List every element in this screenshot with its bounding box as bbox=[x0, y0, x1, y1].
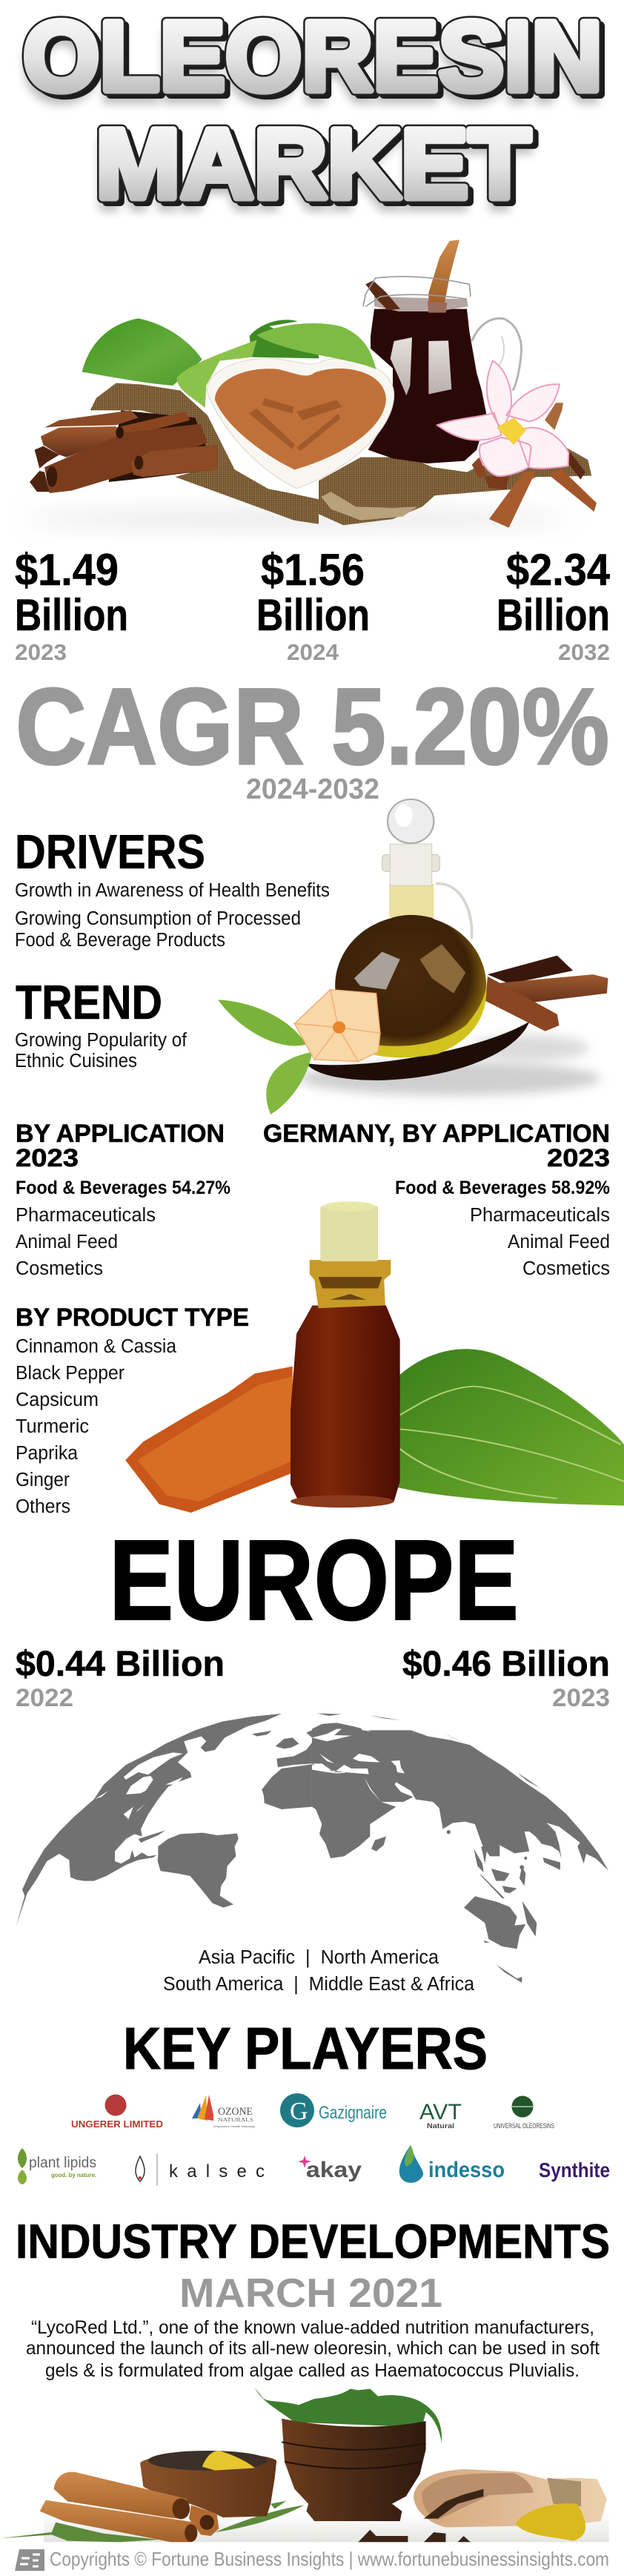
logo: Ozone Naturals: NATURALS bbox=[218, 2117, 253, 2123]
world map globe bbox=[16, 1714, 608, 1983]
development description: “LycoRed Ltd.”, one of the known value-added nutrition manufacturers, bbox=[31, 2317, 594, 2338]
Europe 2022 value: 2022 bbox=[16, 1684, 73, 1712]
stat: 2032 market size: $2.34 bbox=[506, 545, 611, 595]
development description bbox=[26, 2317, 600, 2381]
Europe 2022 value bbox=[16, 1645, 225, 1712]
logo: plant lipids: good. by nature. bbox=[51, 2172, 96, 2179]
by product type panel: Paprika bbox=[16, 1443, 79, 1464]
by product type panel: Turmeric bbox=[16, 1416, 89, 1437]
logo: Gazignaire bbox=[280, 2093, 387, 2127]
date: MARCH 2021 bbox=[179, 2270, 442, 2316]
logo: Gazignaire: G bbox=[290, 2098, 308, 2125]
hero illustration: cinnamon, heart bowl and syrup jug bbox=[22, 240, 597, 529]
title: MARKET bbox=[96, 109, 531, 219]
by application panel: BY APPLICATION bbox=[16, 1120, 225, 1148]
by application panel: Pharmaceuticals bbox=[16, 1205, 156, 1226]
drivers section: DRIVERS bbox=[15, 825, 205, 879]
oil bottle illustration bbox=[218, 799, 608, 1114]
logo: Gazignaire: Gazignaire bbox=[319, 2103, 387, 2123]
by application panel: 2023 bbox=[16, 1144, 79, 1172]
heart bowl bbox=[207, 323, 394, 489]
development description: announced the launch of its all-new oleoresin, which can be used in soft bbox=[26, 2338, 600, 2359]
Europe 2023 value bbox=[402, 1645, 610, 1712]
Europe 2022 value: $0.44 Billion bbox=[16, 1645, 225, 1684]
other regions list bbox=[163, 1947, 475, 1995]
logo: Ozone Naturals: Empowers Health Naturally bbox=[213, 2124, 255, 2128]
spices and bowls illustration bbox=[0, 2388, 609, 2542]
logo: Kalsec: kalsec bbox=[169, 2161, 265, 2182]
stat: 2023 market size: Billion bbox=[15, 590, 128, 640]
title: MARKET bbox=[100, 113, 535, 223]
by application panel: Animal Feed bbox=[16, 1232, 118, 1252]
by product type panel: Cinnamon & Cassia bbox=[16, 1336, 177, 1357]
logo: Ungerer Limited bbox=[71, 2094, 163, 2130]
Europe heading: EUROPE bbox=[109, 1516, 519, 1644]
logo: Ozone Naturals: OZONE bbox=[218, 2106, 253, 2118]
stat: 2024 market size bbox=[256, 545, 370, 665]
stat: 2024 market size: 2024 bbox=[287, 639, 339, 665]
Germany by application panel bbox=[263, 1120, 610, 1279]
by product type panel: Ginger bbox=[16, 1470, 70, 1490]
other regions list: Asia Pacific | North America bbox=[199, 1947, 439, 1968]
by product type panel: Black Pepper bbox=[16, 1363, 125, 1384]
logo: AVT Natural: Natural bbox=[427, 2122, 454, 2130]
stat: 2032 market size: 2032 bbox=[558, 639, 610, 665]
logo: Indesso: indesso bbox=[428, 2158, 505, 2182]
logo: Kalsec bbox=[136, 2154, 265, 2186]
logo: Universal Oleoresins bbox=[494, 2096, 554, 2130]
trend section: TREND bbox=[16, 975, 162, 1029]
logo: AVT Natural: AVT bbox=[419, 2100, 462, 2124]
CAGR headline: 2024-2032 bbox=[246, 773, 379, 805]
Germany by application panel: Pharmaceuticals bbox=[470, 1205, 610, 1226]
title: OLEORESIN bbox=[23, 1, 603, 112]
by product type panel: BY PRODUCT TYPE bbox=[16, 1304, 249, 1332]
Germany by application panel: GERMANY, BY APPLICATION bbox=[263, 1120, 610, 1148]
title: OLEORESIN bbox=[23, 12, 603, 122]
stat: 2024 market size: Billion bbox=[256, 590, 370, 640]
logo: Ozone Naturals bbox=[192, 2095, 255, 2128]
title: OLEORESIN bbox=[27, 5, 607, 116]
right side: burlap and jug bbox=[319, 240, 591, 525]
trend section: Ethnic Cuisines bbox=[15, 1051, 137, 1071]
trend section: Growing Popularity of bbox=[15, 1030, 187, 1051]
left side: burlap, cinnamon sticks and leaves bbox=[30, 318, 319, 524]
stat: 2032 market size bbox=[497, 545, 611, 665]
stat: 2024 market size: $1.56 bbox=[261, 545, 365, 595]
title: MARKET bbox=[96, 109, 531, 219]
Germany by application panel: Animal Feed bbox=[508, 1232, 610, 1252]
trend section bbox=[15, 975, 187, 1071]
key players heading: KEY PLAYERS bbox=[123, 2015, 488, 2081]
Europe 2023 value: 2023 bbox=[552, 1684, 610, 1712]
turmeric, syrup bottle and leaf illustration bbox=[125, 1201, 624, 1513]
stat: 2023 market size: 2023 bbox=[15, 639, 67, 665]
Europe 2023 value: $0.46 Billion bbox=[402, 1645, 610, 1684]
drivers section: Growth in Awareness of Health Benefits bbox=[15, 880, 330, 901]
eastern hemisphere landmasses bbox=[312, 1714, 608, 1983]
logo: akay: akay bbox=[306, 2158, 362, 2182]
Germany by application panel: Cosmetics bbox=[522, 1258, 610, 1279]
by application panel bbox=[16, 1120, 230, 1279]
other regions list: South America | Middle East & Africa bbox=[163, 1974, 475, 1995]
drivers section bbox=[15, 825, 330, 951]
stat: 2023 market size bbox=[15, 545, 128, 665]
logo: Universal Oleoresins: UNIVERSAL OLEORESINS bbox=[494, 2122, 554, 2130]
title bbox=[23, 1, 607, 230]
by application panel: Cosmetics bbox=[16, 1258, 103, 1279]
by application panel: Food & Beverages 54.27% bbox=[16, 1178, 230, 1198]
Germany by application panel: Food & Beverages 58.92% bbox=[395, 1178, 610, 1198]
western hemisphere landmasses bbox=[16, 1714, 312, 1926]
by product type panel: Others bbox=[16, 1496, 70, 1517]
logo: plant lipids bbox=[18, 2148, 96, 2184]
title: OLEORESIN bbox=[23, 1, 603, 112]
logo: Ungerer Limited: UNGERER LIMITED bbox=[71, 2118, 163, 2130]
flower and right cinnamon sticks bbox=[437, 361, 597, 528]
logo: Synthite: Synthite bbox=[539, 2159, 610, 2182]
title: MARKET bbox=[96, 119, 531, 230]
drivers section: Growing Consumption of Processed bbox=[15, 908, 301, 929]
Germany by application panel: 2023 bbox=[547, 1144, 610, 1172]
logo: Indesso bbox=[399, 2145, 505, 2183]
drivers section: Food & Beverage Products bbox=[15, 930, 225, 951]
by product type panel: Capsicum bbox=[16, 1390, 99, 1410]
by product type panel bbox=[16, 1304, 249, 1517]
stat: 2023 market size: $1.49 bbox=[15, 545, 119, 595]
logo: plant lipids: plant lipids bbox=[29, 2155, 96, 2171]
development description: gels & is formulated from algae called as Haematococcus Pluvialis. bbox=[45, 2360, 580, 2381]
